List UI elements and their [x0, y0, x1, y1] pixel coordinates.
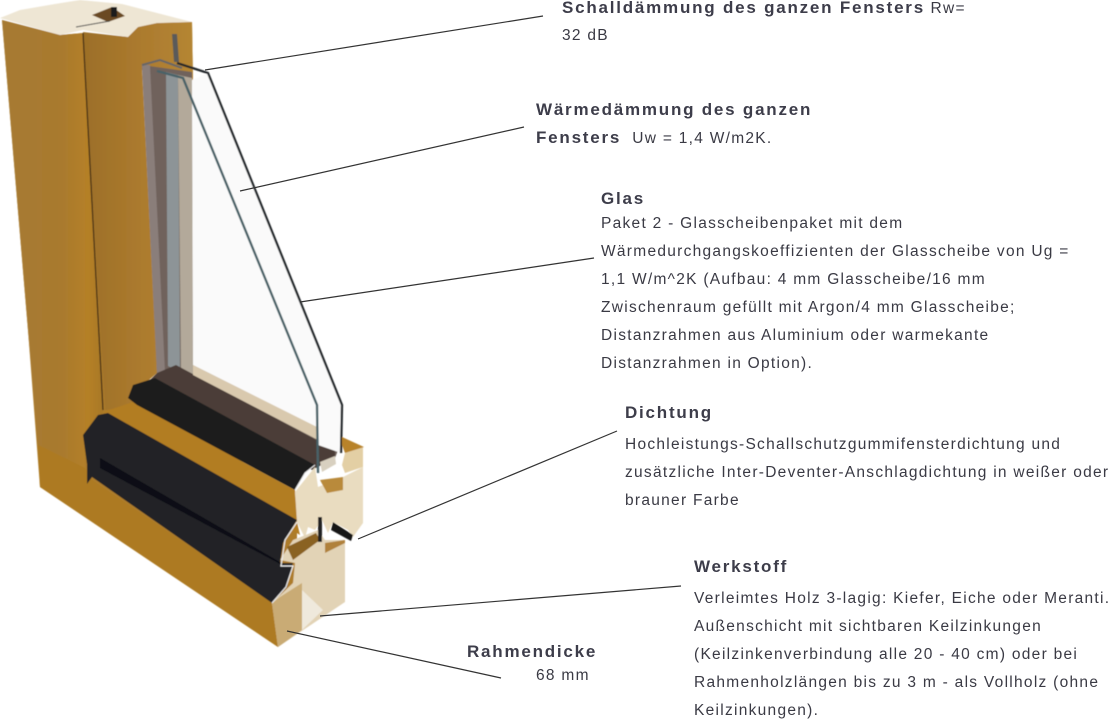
text: thermal insulation: Wärmedämmung des ganzen [536, 100, 812, 119]
text: frame thickness [467, 642, 597, 684]
text: seal: Hochleistungs-Schallschutzgummifensterdichtung und [625, 436, 1061, 453]
upper black seal [128, 378, 315, 490]
bottom rail wood face [38, 445, 278, 647]
text: seal: brauner Farbe [625, 492, 740, 509]
bottom inner brown band [150, 365, 335, 470]
sash end grain [295, 467, 363, 538]
glass pane fill [192, 73, 342, 453]
dark rebate gap [331, 522, 353, 541]
text: seal: zusätzliche Inter-Deventer-Anschlagdichtung in weißer oder [625, 464, 1109, 481]
text: material [694, 557, 1109, 719]
leader lines [205, 16, 681, 678]
lower black seal [83, 413, 297, 603]
text: frame thickness: 68 mm [536, 667, 590, 684]
text: sound insulation: 32 dB [562, 27, 609, 44]
text: glass [601, 189, 1070, 372]
text: material: Verleimtes Holz 3-lagig: Kiefer, Eiche oder Meranti. [694, 590, 1109, 607]
top end grain [0, 0, 192, 37]
text: seal [625, 403, 1109, 509]
text: material: Rahmenholzlängen bis zu 3 m - als Vollholz (ohne [694, 674, 1099, 691]
inner bead grey [142, 65, 342, 458]
frame end grain [272, 530, 345, 647]
sash rail wood [103, 402, 300, 535]
glass lines [157, 71, 318, 473]
text: frame thickness: Rahmendicke [467, 642, 597, 661]
text: thermal insulation: Fensters Uw = 1,4 W/m2K. [536, 128, 773, 147]
text: sound insulation [562, 0, 966, 44]
text: glass: Distanzrahmen in Option). [601, 355, 813, 372]
text: seal: Dichtung [625, 403, 713, 422]
base wood silhouette [2, 20, 297, 647]
text: glass: Paket 2 - Glasscheibenpaket mit dem [601, 215, 903, 232]
text: glass: 1,1 W/m^2K (Aufbau: 4 mm Glasscheibe/16 mm [601, 271, 986, 288]
text: glass: Zwischenraum gefüllt mit Argon/4 mm Glasscheibe; [601, 299, 1016, 316]
text: glass: Wärmedurchgangskoeffizienten der Glasscheibe von Ug = [601, 243, 1070, 260]
inner stile wood face [83, 22, 193, 410]
text: material: Keilzinkungen). [694, 702, 819, 719]
stile groove [83, 33, 103, 410]
outer stile wood face [2, 20, 103, 468]
text: material: Außenschicht mit sichtbaren Keilzinkungen [694, 618, 1042, 635]
text: material: Werkstoff [694, 557, 788, 576]
text: material: (Keilzinkenverbindung alle 20 - 40 cm) oder bei [694, 646, 1078, 663]
text: glass: Distanzrahmen aus Aluminium oder warmekante [601, 327, 989, 344]
text: thermal insulation [536, 100, 812, 147]
text: glass: Glas [601, 189, 645, 208]
